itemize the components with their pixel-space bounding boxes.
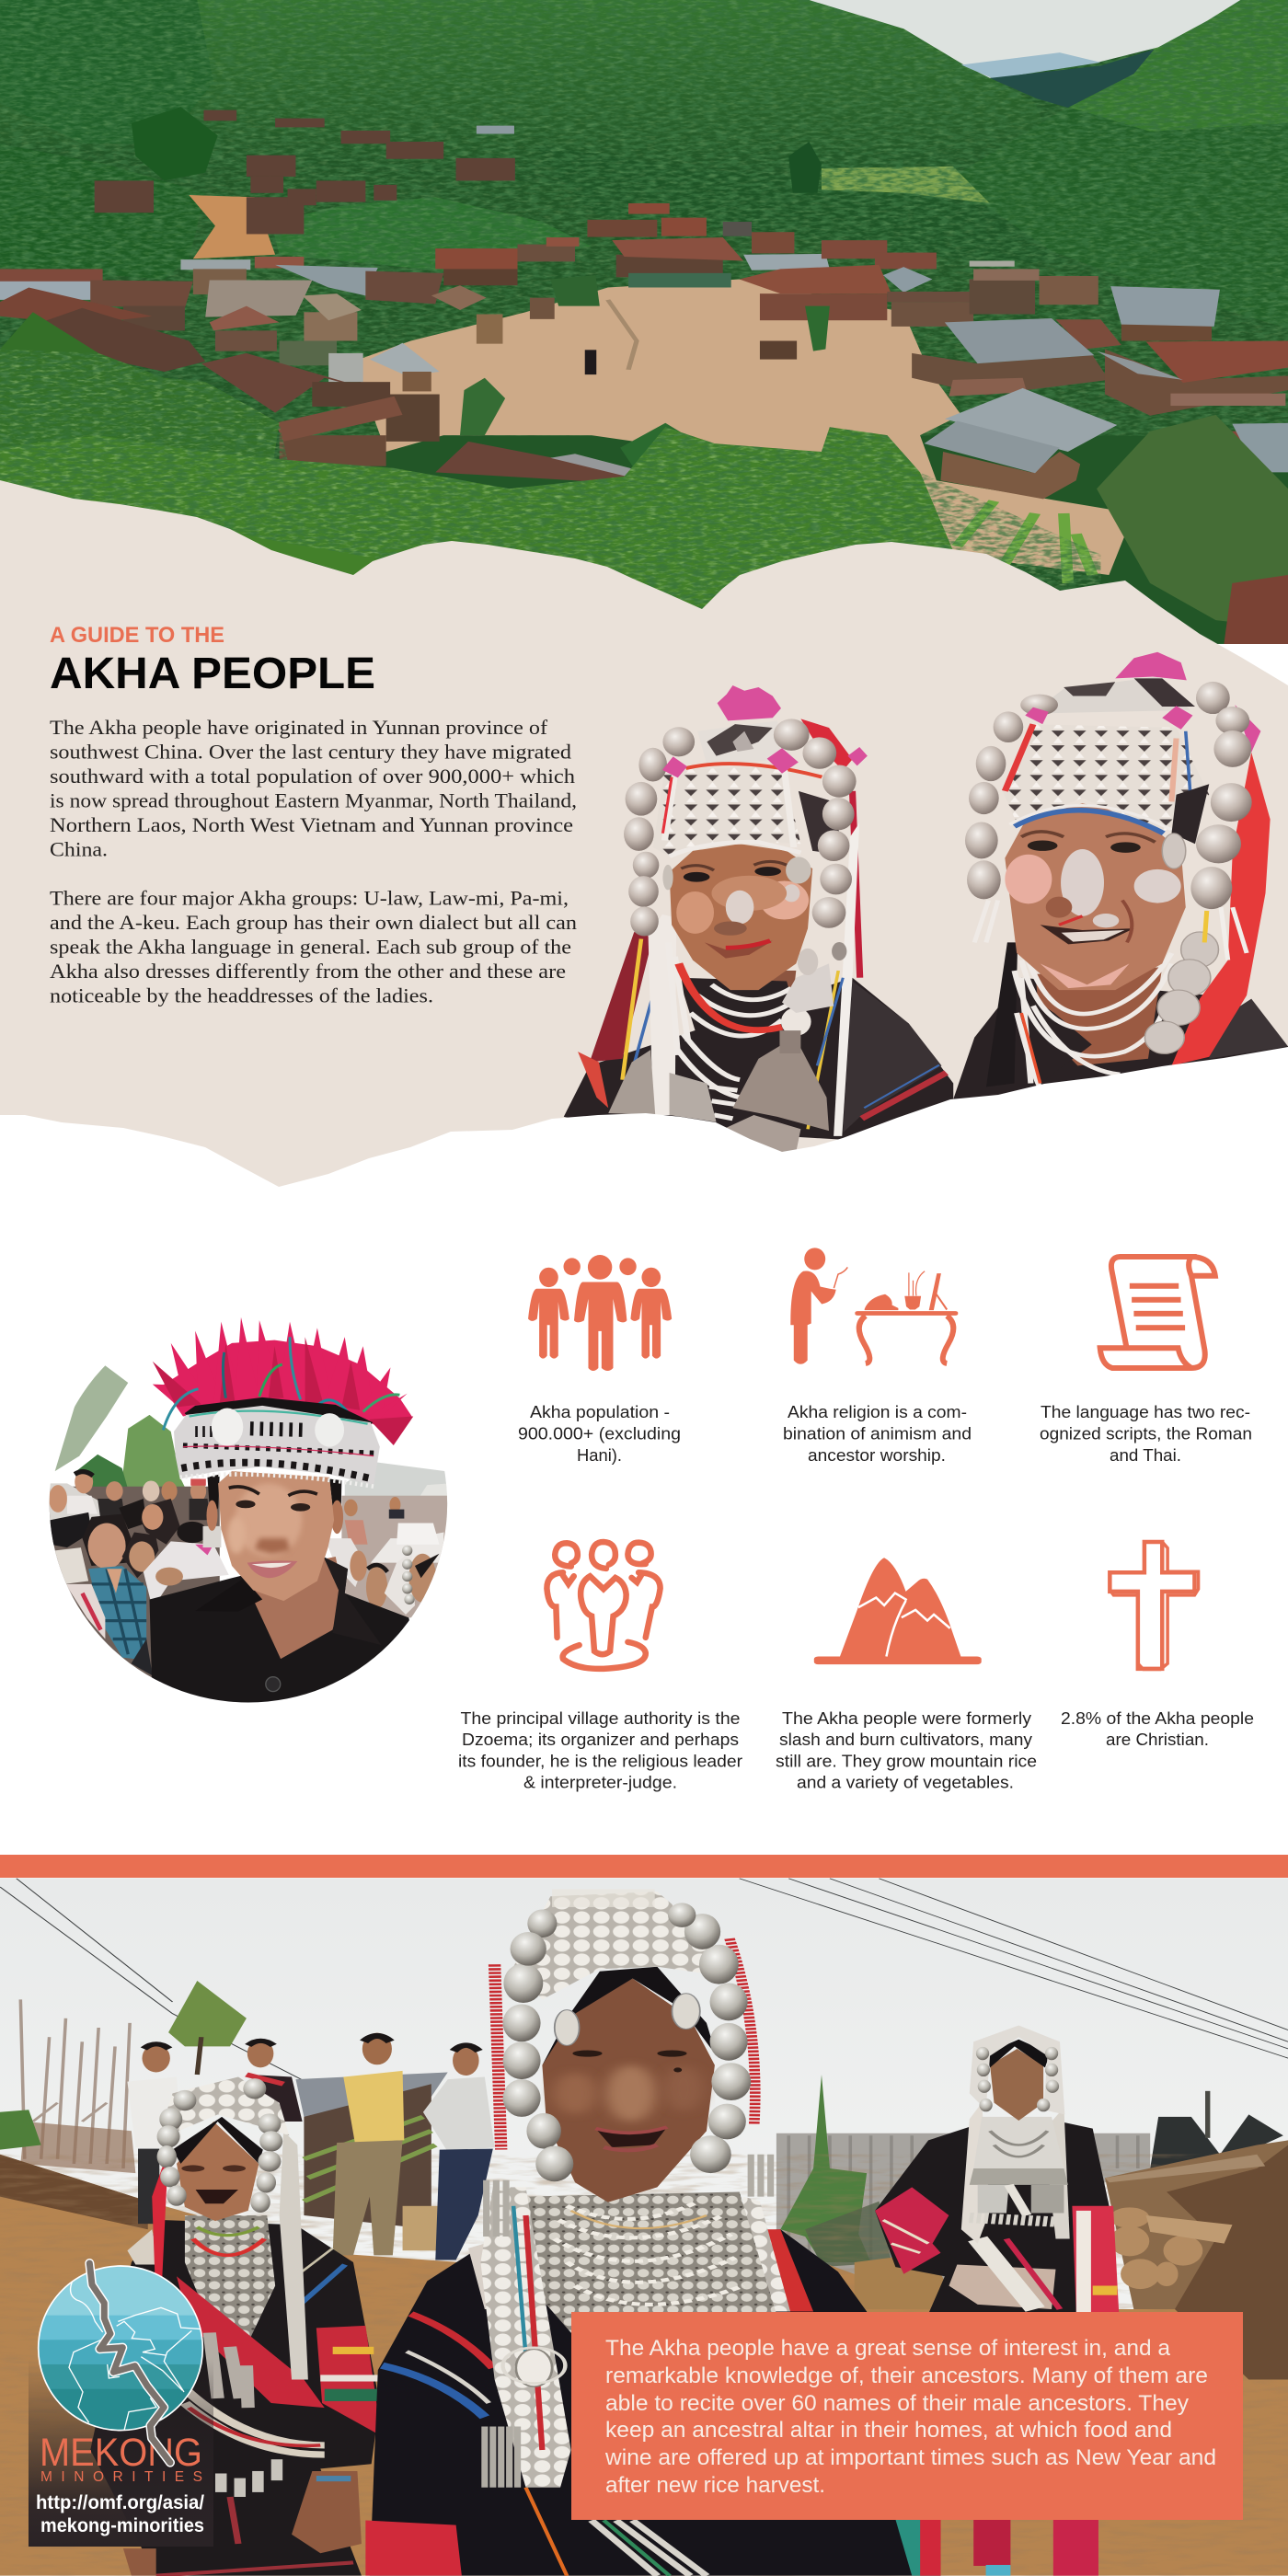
caption: Christianity: 2.8% of the Akha people (1061, 1708, 1254, 1728)
circular portrait: man in feathered hat (46, 1304, 452, 1706)
logo: Mekong Minorities: mekong-minorities (40, 2515, 204, 2536)
icon: ancestor altar (790, 1248, 958, 1364)
photo: Akha mountain village (0, 0, 1288, 644)
icon: scroll (1100, 1257, 1215, 1368)
white torn lower edge (0, 1047, 1288, 1855)
callout: ancestors text box: The Akha people have a great sense of interest in, and a (605, 2336, 1171, 2361)
icon: group of people (528, 1255, 672, 1371)
text block: origins: southwest China. Over the last century they have migrated (50, 740, 571, 764)
heading: a guide to the: A GUIDE TO THE (50, 623, 224, 648)
caption: village authority: The principal village authority is the (460, 1708, 740, 1728)
text block: origins (50, 716, 577, 861)
torn paper panel (0, 480, 1288, 1196)
caption: cultivation: The Akha people were formerly (782, 1708, 1032, 1728)
text block: origins: Northern Laos, North West Vietnam and Yunnan province (50, 813, 573, 836)
portrait: woman on the left (564, 685, 953, 1152)
callout: ancestors text box (571, 2312, 1243, 2520)
portrait: woman on the right (953, 652, 1288, 1119)
callout: ancestors text box: keep an ancestral altar in their homes, at which food and (605, 2418, 1172, 2443)
caption: cultivation: slash and burn cultivators, many (779, 1730, 1033, 1749)
left woman (90, 2077, 381, 2576)
caption: Christianity: are Christian. (1106, 1730, 1209, 1749)
caption: population: 900.000+ (excluding (518, 1424, 681, 1443)
caption: cultivation (776, 1708, 1037, 1792)
caption: language: and Thai. (1110, 1445, 1181, 1465)
text block: origins: The Akha people have originated in Yunnan province of (50, 716, 548, 739)
orange divider band (0, 1855, 1288, 1878)
caption: population: Hani). (577, 1445, 622, 1465)
logo: Mekong Minorities: MEKONG (40, 2431, 202, 2475)
logo: Mekong Minorities (29, 2263, 213, 2547)
icon: mountains (814, 1558, 982, 1664)
caption: language (1040, 1402, 1252, 1465)
caption: religion: bination of animism and (783, 1424, 972, 1443)
caption: village authority: its founder, he is the religious leader (458, 1752, 742, 1770)
icon: Christian cross (1110, 1542, 1199, 1669)
callout: ancestors text box: remarkable knowledge of, their ancestors. Many of them are (605, 2363, 1208, 2388)
caption: cultivation: and a variety of vegetables. (797, 1772, 1014, 1792)
caption: religion (783, 1402, 972, 1465)
caption: village authority: Dzoema; its organizer and perhaps (462, 1730, 739, 1749)
logo: Mekong Minorities: MINORITIES (40, 2469, 202, 2485)
text block: groups: Akha also dresses differently from the other and these are (50, 960, 566, 983)
central woman (365, 1890, 940, 2576)
logo: Mekong Minorities: http://omf.org/asia/ (36, 2492, 204, 2513)
caption: village authority (458, 1708, 742, 1792)
caption: language: The language has two rec- (1041, 1402, 1250, 1421)
text block: groups: speak the Akha language in general. Each sub group of the (50, 935, 571, 959)
caption: population: Akha population - (530, 1402, 670, 1421)
callout: ancestors text box: after new rice harvest. (605, 2473, 825, 2498)
caption: population (518, 1402, 681, 1465)
text block: groups (50, 887, 577, 1006)
text block: origins: China. (50, 837, 108, 861)
caption: village authority: & interpreter-judge. (523, 1772, 677, 1792)
text block: groups: There are four major Akha groups: U-law, Law-mi, Pa-mi, (50, 887, 569, 909)
text block: groups: and the A-keu. Each group has their own dialect but all can (50, 911, 577, 934)
photo: three Akha women in silver headdresses (0, 1878, 1288, 2576)
icon: village authority figures (546, 1542, 661, 1669)
text block: origins: southward with a total population of over 900,000+ which (50, 765, 575, 788)
text block: origins: is now spread throughout Eastern Myanmar, North Thailand, (50, 789, 577, 811)
callout: ancestors text box: able to recite over 60 names of their male ancestors. They (605, 2391, 1189, 2416)
heading: Akha People: AKHA PEOPLE (50, 650, 375, 698)
caption: religion: ancestor worship. (808, 1445, 946, 1465)
callout: ancestors text box: wine are offered up at important times such as New Year and (604, 2445, 1216, 2470)
caption: religion: Akha religion is a com- (788, 1402, 967, 1421)
text block: groups: noticeable by the headdresses of the ladies. (50, 984, 433, 1006)
caption: language: ognized scripts, the Roman (1040, 1424, 1252, 1443)
caption: cultivation: still are. They grow mountain rice (776, 1752, 1037, 1770)
caption: Christianity (1061, 1708, 1254, 1749)
right woman (875, 2025, 1119, 2576)
